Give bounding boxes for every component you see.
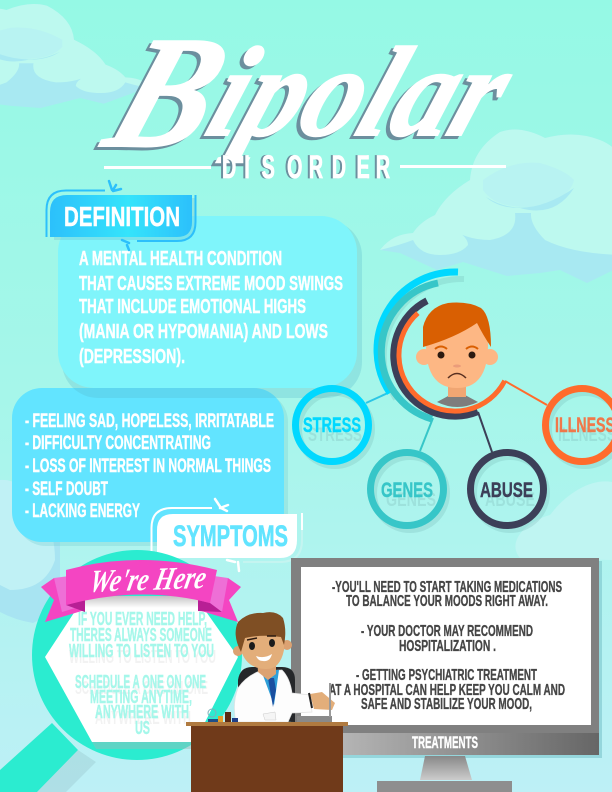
help text: IF YOU EVER NEED HELP, (78, 609, 207, 629)
definition banner (46, 181, 196, 250)
panel: symptoms (12, 388, 288, 546)
help text (69, 609, 216, 738)
definition text (79, 248, 343, 368)
help text: SCHEDULE A ONE ON ONE (75, 672, 206, 692)
treatments text: HOSPITALIZATION . (399, 638, 496, 655)
ribbon: we're here: We're Here (86, 560, 210, 600)
circle: genes (370, 452, 444, 526)
doctor coat (234, 670, 312, 722)
circle: genes: GENES (386, 490, 436, 511)
neck (257, 658, 276, 680)
help text: SCHEDULE A ONE ON ONE (75, 678, 208, 698)
help text: ANYWHERE WITH (95, 708, 191, 728)
subtitle: disorder: DISORDER (222, 149, 390, 185)
icon: worried face (416, 303, 498, 407)
help text: THERES ALWAYS SOMEONE (70, 625, 212, 645)
definition text: (MANIA OR HYPOMANIA) AND LOWS (79, 321, 328, 343)
cloud: right (380, 130, 612, 283)
arc and ring shadows (298, 279, 612, 530)
cloud: top left (0, 4, 155, 113)
symptoms list: - LACKING ENERGY (25, 501, 140, 522)
chair (238, 667, 295, 722)
help text: WILLING TO LISTEN TO YOU (69, 641, 214, 661)
doctor at desk (186, 612, 348, 792)
treatments text (329, 579, 565, 713)
ribbon: we're here (41, 560, 241, 622)
help text: ANYWHERE WITH (95, 702, 189, 722)
definition text: A MENTAL HEALTH CONDITION (79, 248, 282, 270)
cloud: lower right (515, 481, 612, 560)
symptoms list: - SELF DOUBT (25, 479, 108, 500)
title: ipolar (188, 24, 528, 166)
desk items (208, 683, 332, 722)
causes diagram (296, 272, 612, 530)
circle: stress: STRESS (308, 425, 362, 446)
circle: stress (296, 388, 368, 462)
symptoms list: - FEELING SAD, HOPELESS, IRRITATABLE (25, 411, 274, 432)
doctor head (233, 612, 292, 669)
circle: illness (546, 388, 612, 462)
symptoms list: - LOSS OF INTEREST IN NORMAL THINGS (25, 456, 271, 477)
title: B (82, 7, 246, 184)
subtitle: disorder: DISORDER (220, 149, 388, 185)
symptoms banner (152, 499, 302, 571)
arcs (377, 272, 505, 419)
desk (186, 722, 348, 792)
definition text: THAT CAUSES EXTREME MOOD SWINGS (79, 273, 343, 295)
panel: definition (58, 216, 362, 398)
doctor hands (263, 692, 335, 720)
circle: abuse: ABUSE (485, 490, 535, 511)
shirt and tie (261, 670, 279, 707)
definition text: THAT INCLUDE EMOTIONAL HIGHS (79, 296, 306, 318)
definition banner: DEFINITION (64, 201, 180, 232)
subtitle: disorder (104, 149, 506, 185)
title: B (86, 4, 250, 181)
circle: stress: STRESS (303, 414, 361, 437)
circle: abuse: ABUSE (480, 479, 533, 502)
title: ipolar (192, 21, 532, 163)
symptoms list: - DIFFICULTY CONCENTRATING (25, 433, 211, 454)
title (82, 4, 538, 184)
circle: genes: GENES (381, 479, 433, 502)
cloud: lower left (0, 480, 60, 623)
help text: WILLING TO LISTEN TO YOU (69, 647, 216, 667)
symptoms banner: SYMPTOMS (173, 520, 288, 553)
connector lines (366, 381, 547, 452)
help text: US (135, 718, 150, 738)
symptoms list (25, 411, 274, 522)
treatments label: TREATMENTS (412, 733, 478, 752)
circle: abuse (470, 452, 544, 526)
magnifying glass (0, 550, 242, 792)
help text: MEETING ANYTIME, (90, 687, 192, 707)
monitor (291, 558, 602, 792)
definition text: (DEPRESSION). (79, 346, 185, 368)
